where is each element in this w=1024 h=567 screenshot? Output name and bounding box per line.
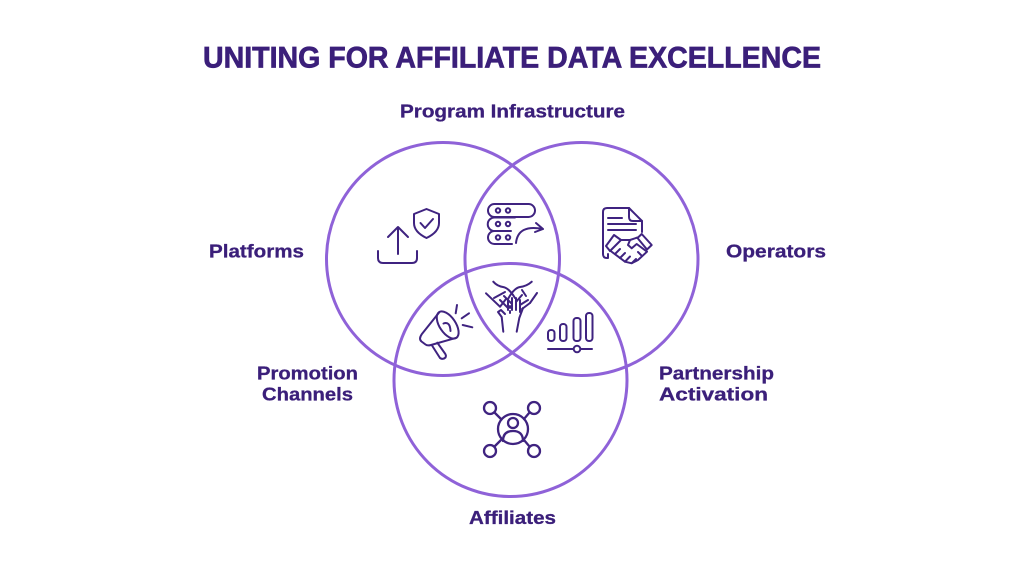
label: promotion channels — [257, 364, 358, 404]
venn diagram — [326, 142, 698, 496]
label: platforms: Platforms — [209, 242, 304, 262]
label: partnership activation — [659, 364, 774, 404]
icon: megaphone — [420, 305, 472, 359]
label: affiliates: Affiliates — [469, 508, 556, 528]
label: partnership activation: Activation — [659, 384, 768, 404]
icon: upload with shield — [378, 209, 439, 263]
label: program infrastructure: Program Infrastructure — [400, 102, 625, 122]
circle: affiliates — [394, 264, 627, 496]
icon: server with arrow — [488, 204, 543, 244]
circle: operators — [465, 142, 698, 376]
label: partnership activation: Partnership — [659, 364, 774, 384]
icon: affiliate network — [484, 402, 540, 457]
icon: contract with handshake — [603, 208, 652, 263]
label: operators: Operators — [726, 242, 826, 262]
circle: platforms — [326, 142, 560, 376]
title: UNITING FOR AFFILIATE DATA EXCELLENCE — [203, 42, 821, 74]
label: promotion channels: Channels — [262, 384, 353, 404]
icon: bar chart with slider — [548, 313, 592, 352]
icon: stacked hands — [486, 282, 537, 332]
label: promotion channels: Promotion — [257, 364, 358, 384]
